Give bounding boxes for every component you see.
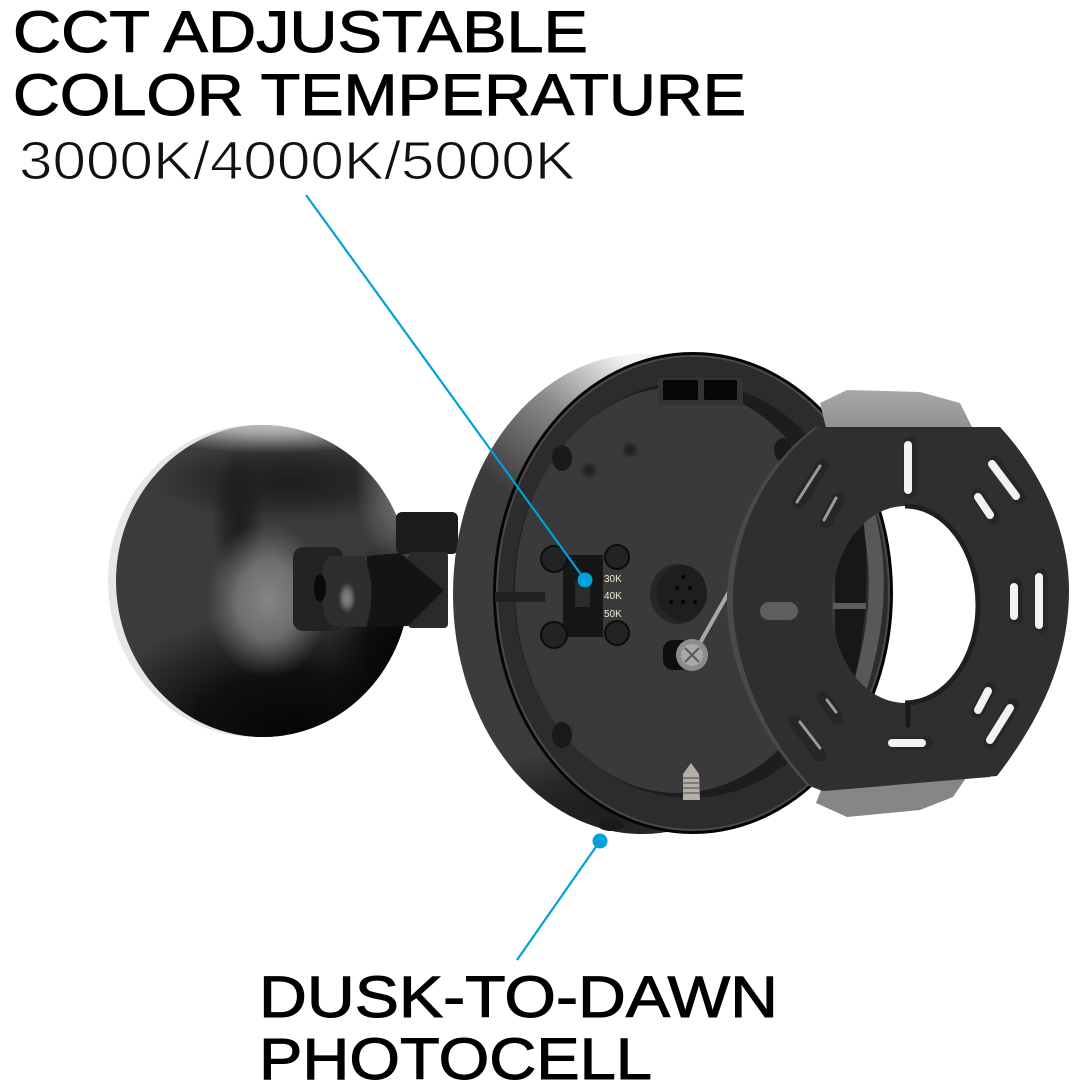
icon: rear dome of the light head xyxy=(108,425,408,737)
icon: CCT switch and standoffs: 30K xyxy=(604,574,622,585)
subtitle: temperature options: 3000K/4000K/5000K xyxy=(19,131,575,191)
icon: CCT switch and standoffs: 50K xyxy=(604,609,622,620)
icon: gasket behind plate xyxy=(816,390,972,817)
arrow: photocell callout xyxy=(517,834,608,960)
title: CCT adjustable color temperature: COLOR TEMPERATURE xyxy=(13,63,746,128)
icon: corner standoffs and dimples xyxy=(495,438,792,748)
icon: perforated grommet xyxy=(650,564,707,624)
icon: CCT switch and standoffs xyxy=(541,545,629,648)
icon: mounting plate xyxy=(727,427,1069,791)
icon: threaded stud xyxy=(683,763,700,800)
heading: dusk-to-dawn photocell: DUSK-TO-DAWN xyxy=(259,965,778,1030)
mounting plate slots xyxy=(769,443,1041,755)
icon: swivel mounting arm xyxy=(293,512,458,631)
title: CCT adjustable color temperature: CCT ADJUSTABLE xyxy=(13,0,588,65)
heading: dusk-to-dawn photocell xyxy=(259,965,778,1088)
arrow: CCT switch callout xyxy=(306,195,592,588)
title: CCT adjustable color temperature xyxy=(13,0,746,128)
icon: housing terminal block xyxy=(658,378,743,405)
icon: photocell sensor xyxy=(598,819,624,831)
icon: light housing shell xyxy=(453,352,893,834)
icon: ground screw and wire xyxy=(663,590,730,671)
icon: CCT switch and standoffs: 40K xyxy=(604,591,622,602)
